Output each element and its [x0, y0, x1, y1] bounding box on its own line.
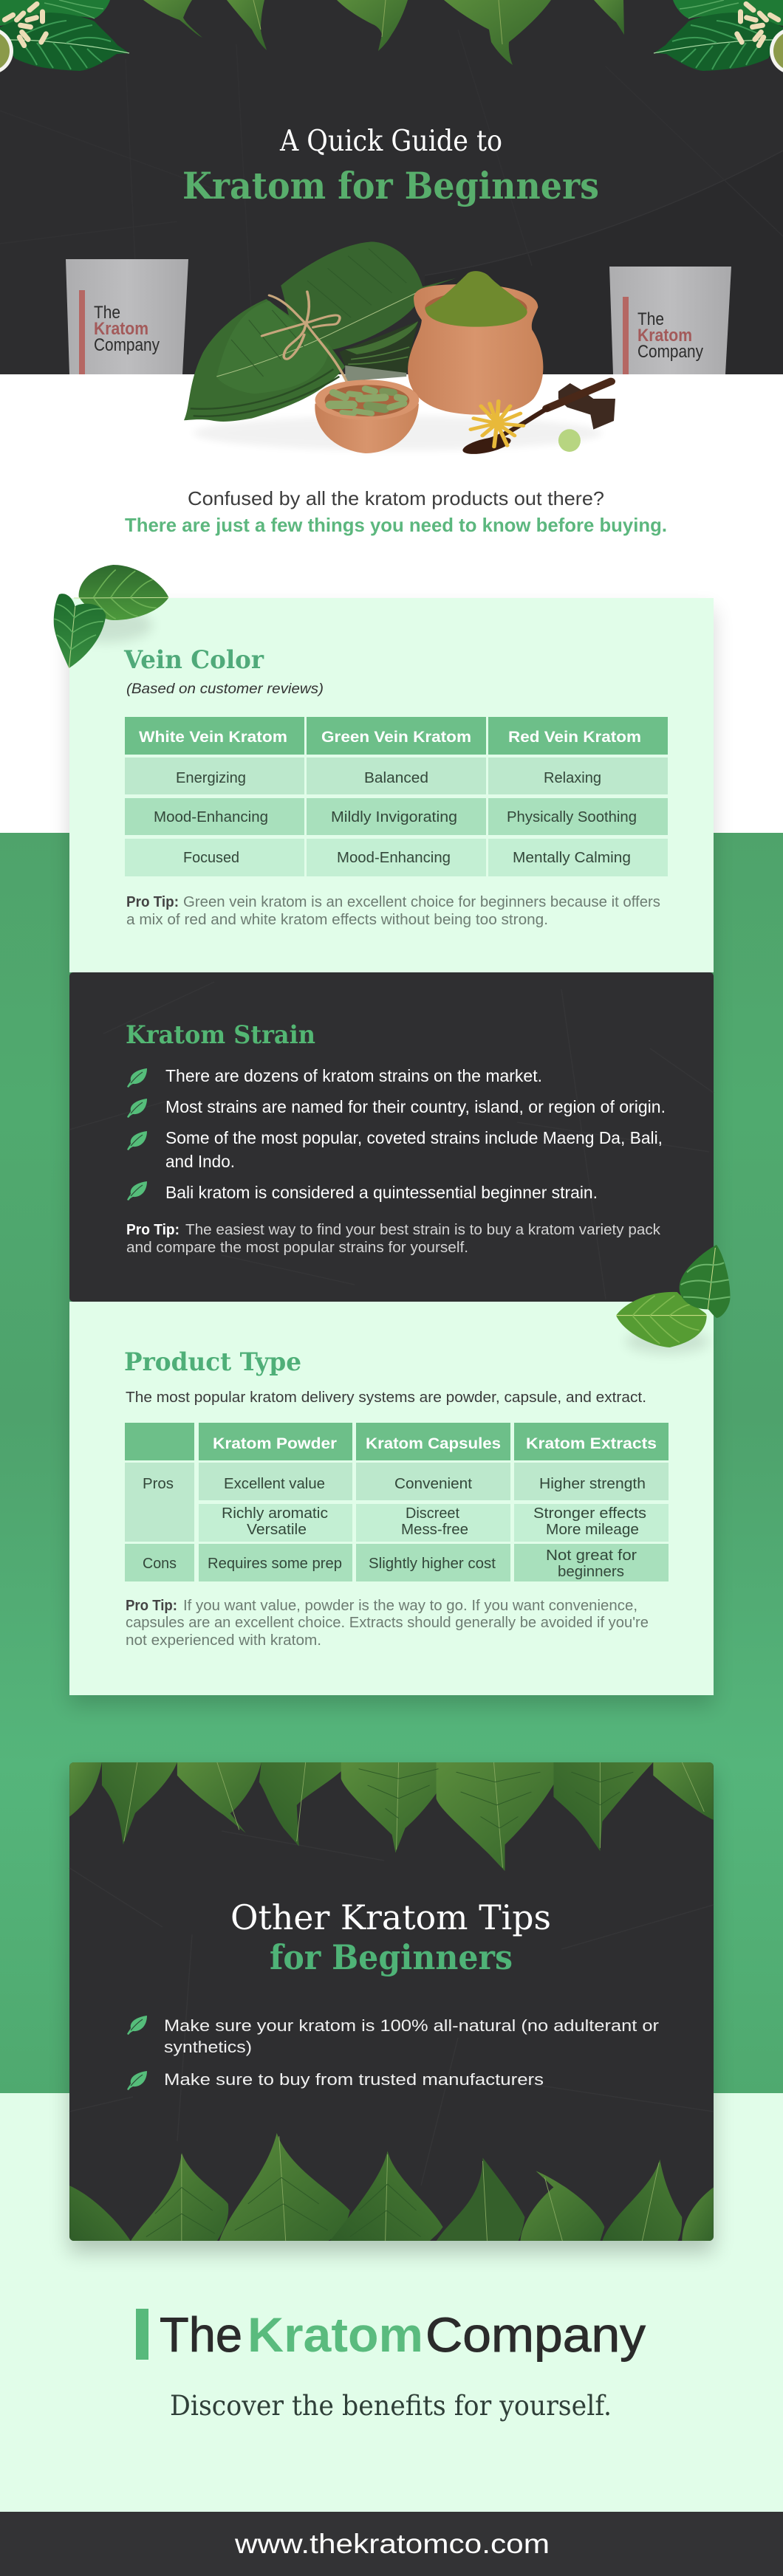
bullet list: tips: synthetics) [164, 2038, 252, 2056]
footer [0, 2512, 783, 2576]
product bag: left [66, 259, 188, 374]
yellow flower [471, 401, 523, 447]
table: product type: Versatile [247, 1522, 307, 1538]
page background: green band [0, 833, 783, 2093]
bullet list: strain facts: There are dozens of kratom strains on the market. [165, 1066, 542, 1085]
icon: top leaves row [143, 0, 624, 65]
bullet list: tips: Make sure to buy from trusted manufacturers [164, 2070, 544, 2089]
table: vein color: White Vein Kratom [139, 729, 287, 746]
table: vein color: Green Vein Kratom [321, 729, 471, 746]
product bag: left: The [94, 303, 120, 323]
product bag: left: Kratom [94, 319, 148, 339]
table: vein color: Focused [183, 850, 239, 866]
table: product type: Kratom Extracts [526, 1435, 657, 1452]
subheading: (Based on customer reviews) [126, 681, 324, 697]
pro tip: strain [126, 1222, 661, 1256]
pro tip: product type: If you want value, powder is the way to go. If you want convenience, [183, 1598, 637, 1614]
website url: www.thekratomco.com [234, 2529, 550, 2559]
clay pot with powder [408, 271, 543, 415]
intro text [125, 487, 667, 536]
table: product type: Stronger effects [533, 1505, 646, 1522]
table: product type: Slightly higher cost [369, 1556, 496, 1572]
bullet list: tips [127, 2016, 659, 2090]
twine [262, 292, 346, 382]
table: product type: Requires some prep [208, 1556, 342, 1572]
intro sentence: The most popular kratom delivery systems are powder, capsule, and extract. [126, 1390, 646, 1406]
heading: product type: Product Type [124, 1347, 301, 1377]
table: product type: Not great for [546, 1548, 637, 1564]
product bag: left: Company [94, 335, 160, 355]
table: vein color [125, 717, 668, 876]
pro tip: product type: Pro Tip: [126, 1598, 177, 1614]
title [182, 125, 599, 207]
table: vein color: Mood-Enhancing [154, 809, 268, 825]
bullet list: tips: Make sure your kratom is 100% all-natural (no adulterant or [164, 2016, 659, 2035]
bullet list: strain facts: and Indo. [165, 1152, 235, 1171]
tagline: Discover the benefits for yourself. [170, 2390, 612, 2422]
illustration: kratom leaves, pot, bowl and spoon [184, 241, 615, 458]
table: product type: Excellent value [224, 1476, 325, 1492]
table: vein color: Balanced [364, 770, 428, 786]
pro tip: product type [126, 1598, 649, 1649]
logo: the kratom company [136, 2307, 646, 2362]
logo: the kratom company: The [160, 2307, 242, 2362]
pro tip: product type: capsules are an excellent choice. Extracts should generally be avoided if you're [126, 1615, 649, 1631]
bullet list: strain facts: Most strains are named for their country, island, or region of origin. [165, 1097, 666, 1116]
page background: white section [0, 0, 783, 833]
table: product type: More mileage [546, 1522, 639, 1538]
product bag: right [609, 267, 731, 374]
icon: top-left leaves with capsules [0, 0, 129, 75]
table: product type: beginners [558, 1564, 624, 1580]
table: product type: Pros [143, 1476, 174, 1492]
table: product type: Kratom Capsules [366, 1435, 501, 1452]
pro tip: strain: Pro Tip: [126, 1222, 179, 1238]
heading: other kratom tips [230, 1897, 551, 1977]
wooden spoon and rest [461, 382, 615, 458]
pro tip: strain: and compare the most popular strains for yourself. [126, 1240, 468, 1256]
table: vein color: Mood-Enhancing [337, 850, 451, 866]
panel: kratom strain [69, 972, 714, 1302]
table: product type: Higher strength [539, 1476, 646, 1492]
heading: other kratom tips: for Beginners [270, 1937, 513, 1977]
table: vein color: Physically Soothing [507, 809, 637, 825]
leaf border: bottom [69, 2133, 714, 2241]
pro tip: vein color: Pro Tip: [126, 894, 179, 910]
table: vein color: Mildly Invigorating [331, 809, 457, 825]
panel: product type [69, 1302, 714, 1695]
white floor [0, 374, 783, 611]
leaf bundle [184, 241, 456, 422]
table: vein color: Mentally Calming [513, 850, 631, 866]
table: product type: Richly aromatic [222, 1505, 328, 1522]
title line 2: Kratom for Beginners [182, 164, 599, 207]
product bag: right: Company [637, 342, 703, 362]
intro line 2: There are just a few things you need to know before buying. [125, 514, 667, 536]
table: product type [125, 1423, 669, 1581]
pro tip: strain: The easiest way to find your best strain is to buy a kratom variety pack [185, 1222, 661, 1238]
table: product type: Mess-free [401, 1522, 468, 1538]
intro line 1: Confused by all the kratom products out there? [188, 487, 604, 509]
table: product type: Convenient [394, 1476, 472, 1492]
table: vein color: Red Vein Kratom [508, 729, 641, 746]
pro tip: vein color: a mix of red and white kratom effects without being too strong. [126, 912, 548, 928]
table: vein color: Energizing [176, 770, 246, 786]
panel: vein color [69, 598, 714, 972]
clay bowl with capsules [315, 379, 419, 453]
card shadows [69, 609, 714, 2252]
product bag: right: Kratom [637, 326, 692, 346]
table: product type: Discreet [406, 1505, 459, 1522]
heading: vein color: Vein Color [123, 645, 264, 675]
pro tip: product type: not experienced with kratom. [126, 1632, 321, 1649]
pro tip: vein color [126, 894, 660, 928]
logo: the kratom company: Company [425, 2307, 646, 2362]
logo: the kratom company: Kratom [247, 2307, 423, 2362]
icon: top-right leaves with capsules [654, 0, 783, 75]
bullet list: strain facts: Some of the most popular, coveted strains include Maeng Da, Bali, [165, 1128, 663, 1147]
heading: kratom strain: Kratom Strain [126, 1020, 315, 1050]
product bag: right: The [637, 309, 664, 329]
icon: leaves on strain and product cards [616, 1245, 730, 1353]
panel: other kratom tips [69, 1762, 714, 2241]
table: product type: Cons [143, 1556, 177, 1572]
icon: leaves on vein color card [54, 565, 168, 668]
green ball [558, 429, 581, 452]
pro tip: vein color: Green vein kratom is an excellent choice for beginners because it offers [183, 894, 660, 910]
table: product type: Kratom Powder [213, 1435, 337, 1452]
title line 1: A Quick Guide to [279, 125, 502, 158]
leaf border: top [69, 1762, 714, 1871]
bullet list: strain facts: Bali kratom is considered a quintessential beginner strain. [165, 1183, 598, 1202]
heading: other kratom tips: Other Kratom Tips [230, 1897, 551, 1937]
panel: hero dark background [0, 0, 783, 374]
page background: mint section [0, 2093, 783, 2512]
table: vein color: Relaxing [544, 770, 601, 786]
bullet list: strain facts [127, 1066, 666, 1202]
